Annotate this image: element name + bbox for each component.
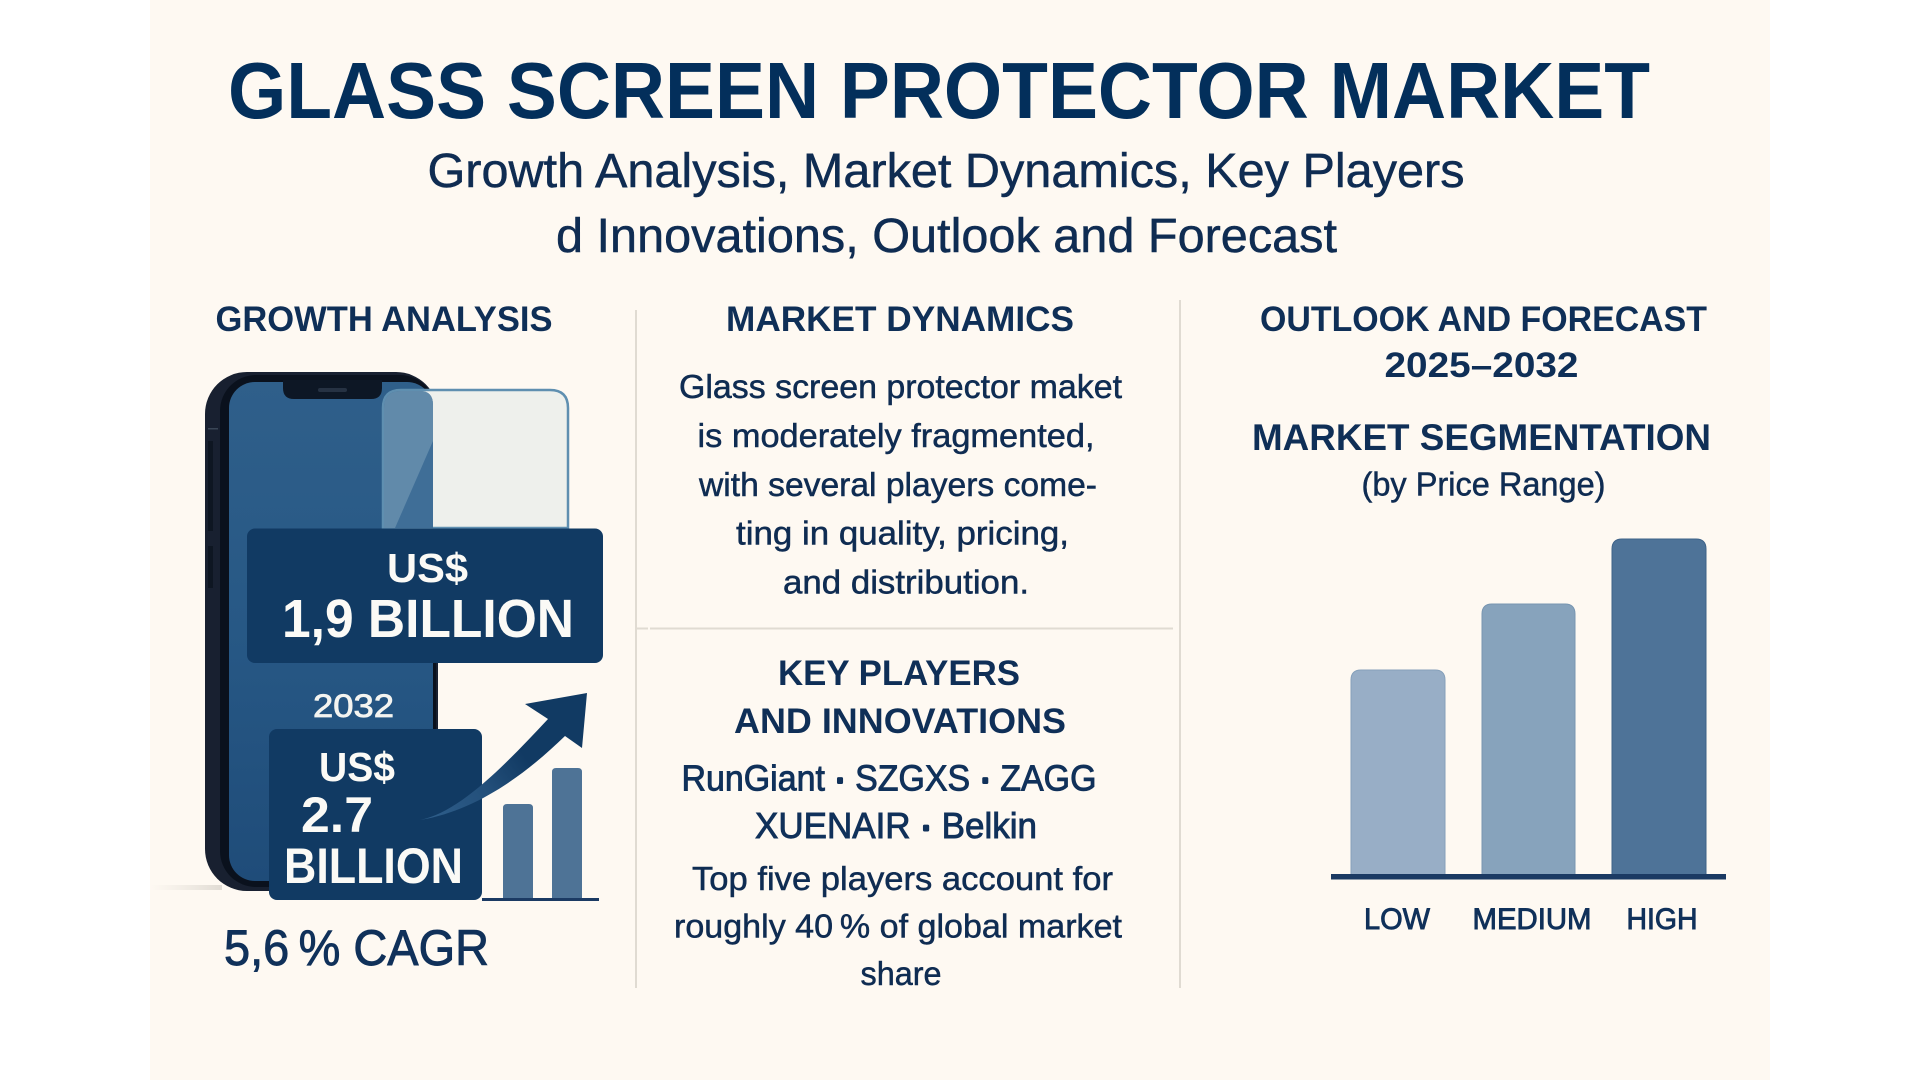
text block: market share: roughly 40 % of global market	[674, 908, 1122, 944]
bar chart: price range segmentation	[1331, 539, 1726, 936]
callout: market value 2032: US$	[319, 744, 395, 790]
callout: market value 2025: 1,9 BILLION	[282, 589, 574, 649]
text block: market share: Top five players account for	[692, 860, 1113, 897]
icon: smartphone	[205, 372, 438, 891]
text block: company names	[682, 758, 1096, 846]
text block: dynamics description: ting in quality, pricing,	[736, 514, 1069, 552]
subtitle	[428, 145, 1464, 263]
callout: market value 2025: US$	[387, 545, 468, 591]
chart baseline	[1331, 874, 1726, 880]
callout: market value 2032: 2.7	[301, 787, 373, 843]
text block: dynamics description: Glass screen protector maket	[679, 368, 1122, 405]
panel: market dynamics	[679, 300, 1122, 600]
title: GLASS SCREEN PROTECTOR MARKET	[228, 46, 1650, 135]
icon: glass protector	[383, 390, 568, 528]
subtitle: d Innovations, Outlook and Forecast	[556, 210, 1337, 263]
heading: market segmentation: (by Price Range)	[1362, 466, 1606, 502]
callout: market value 2032: BILLION	[284, 838, 463, 894]
bar chart: growth bars	[482, 768, 599, 901]
text block: company names: XUENAIR · Belkin	[755, 805, 1037, 846]
bar: high	[1612, 539, 1706, 875]
heading: key players and innovations	[734, 654, 1066, 741]
label: year 2032: 2032	[313, 688, 394, 724]
arrow: growth trend	[420, 693, 587, 820]
label: low: LOW	[1364, 903, 1431, 936]
bar: medium	[1482, 604, 1575, 875]
label: high: HIGH	[1626, 903, 1698, 936]
panel: key players	[674, 654, 1122, 992]
icon: floor shadow	[150, 885, 222, 890]
heading: market segmentation: MARKET SEGMENTATION	[1252, 417, 1711, 458]
heading: outlook and forecast	[1260, 300, 1707, 385]
heading: key players and innovations: AND INNOVATIONS	[734, 702, 1066, 741]
heading: market segmentation	[1252, 417, 1711, 502]
panel: growth analysis	[150, 300, 603, 976]
column dividers	[636, 300, 1180, 988]
panel: outlook and forecast	[1252, 300, 1726, 936]
text block: market share	[674, 860, 1122, 992]
heading: growth analysis: GROWTH ANALYSIS	[216, 300, 552, 339]
text block: dynamics description	[679, 368, 1122, 600]
stat: CAGR: 5,6 % CAGR	[224, 920, 489, 976]
text block: market share: share	[860, 955, 942, 992]
heading: outlook and forecast: OUTLOOK AND FORECAST	[1260, 300, 1707, 339]
text block: dynamics description: with several players come-	[698, 466, 1097, 503]
text block: dynamics description: and distribution.	[783, 564, 1029, 600]
subtitle: Growth Analysis, Market Dynamics, Key Players	[428, 145, 1464, 198]
callout: market value 2032	[269, 729, 482, 900]
heading: key players and innovations: KEY PLAYERS	[778, 654, 1020, 693]
text block: dynamics description: is moderately fragmented,	[698, 417, 1094, 454]
label: medium: MEDIUM	[1472, 903, 1592, 936]
heading: market dynamics: MARKET DYNAMICS	[726, 300, 1074, 339]
bar: low	[1351, 670, 1445, 875]
heading: outlook and forecast: 2025–2032	[1384, 346, 1578, 385]
callout: market value 2025	[247, 528, 603, 663]
text block: company names: RunGiant · SZGXS · ZAGG	[682, 758, 1096, 798]
